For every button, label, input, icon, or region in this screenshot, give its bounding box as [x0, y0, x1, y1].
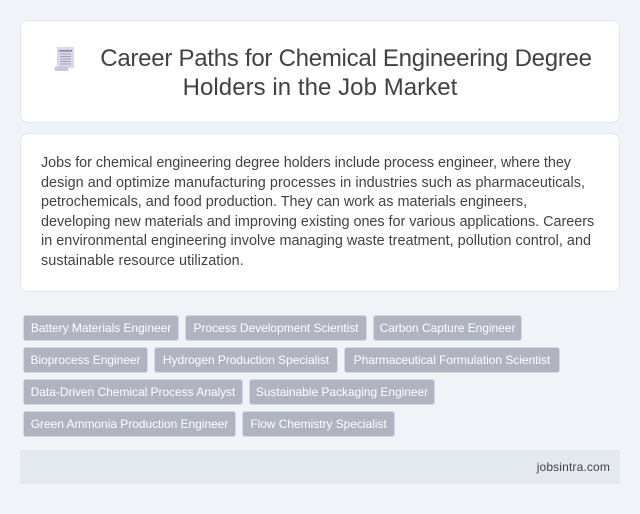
tag	[23, 411, 236, 437]
description text: in environmental engineering involve managing waste treatment, pollution control, and	[41, 233, 591, 249]
tag: Bioprocess Engineer	[30, 353, 140, 367]
tag	[344, 347, 560, 373]
tag	[154, 347, 338, 373]
tag	[373, 315, 522, 341]
title: Career Paths for Chemical Engineering Degree	[100, 45, 592, 72]
description text: Jobs for chemical engineering degree holders include process engineer, where they	[41, 155, 571, 171]
description text: design and optimize manufacturing processes in industries such as pharmaceuticals,	[41, 174, 585, 190]
tag	[249, 379, 435, 405]
icon: document scroll	[54, 47, 74, 71]
description text: petrochemicals, and food production. They can work as materials engineers,	[41, 194, 527, 210]
tag	[185, 315, 367, 341]
description text	[41, 155, 594, 268]
tag: Flow Chemistry Specialist	[250, 417, 387, 431]
footer bar	[20, 450, 620, 484]
tag	[23, 347, 148, 373]
title	[100, 45, 592, 101]
description panel	[20, 133, 620, 292]
tag: Data-Driven Chemical Process Analyst	[31, 385, 235, 399]
tag: Hydrogen Production Specialist	[163, 353, 329, 367]
tag: Sustainable Packaging Engineer	[256, 385, 428, 399]
tag	[242, 411, 395, 437]
header panel	[20, 20, 620, 123]
tag: Battery Materials Engineer	[31, 321, 171, 335]
tag	[23, 379, 243, 405]
tag: Process Development Scientist	[194, 321, 358, 335]
description text: sustainable resource utilization.	[41, 252, 244, 268]
footer source text: jobsintra.com	[537, 460, 610, 474]
description text: developing new materials and improving existing ones for various applications. Careers	[41, 214, 594, 230]
tag: Carbon Capture Engineer	[380, 321, 515, 335]
tag	[23, 315, 179, 341]
title: Holders in the Job Market	[183, 74, 457, 101]
tag: Pharmaceutical Formulation Scientist	[354, 353, 550, 367]
tag list	[23, 315, 560, 437]
tag: Green Ammonia Production Engineer	[31, 417, 228, 431]
